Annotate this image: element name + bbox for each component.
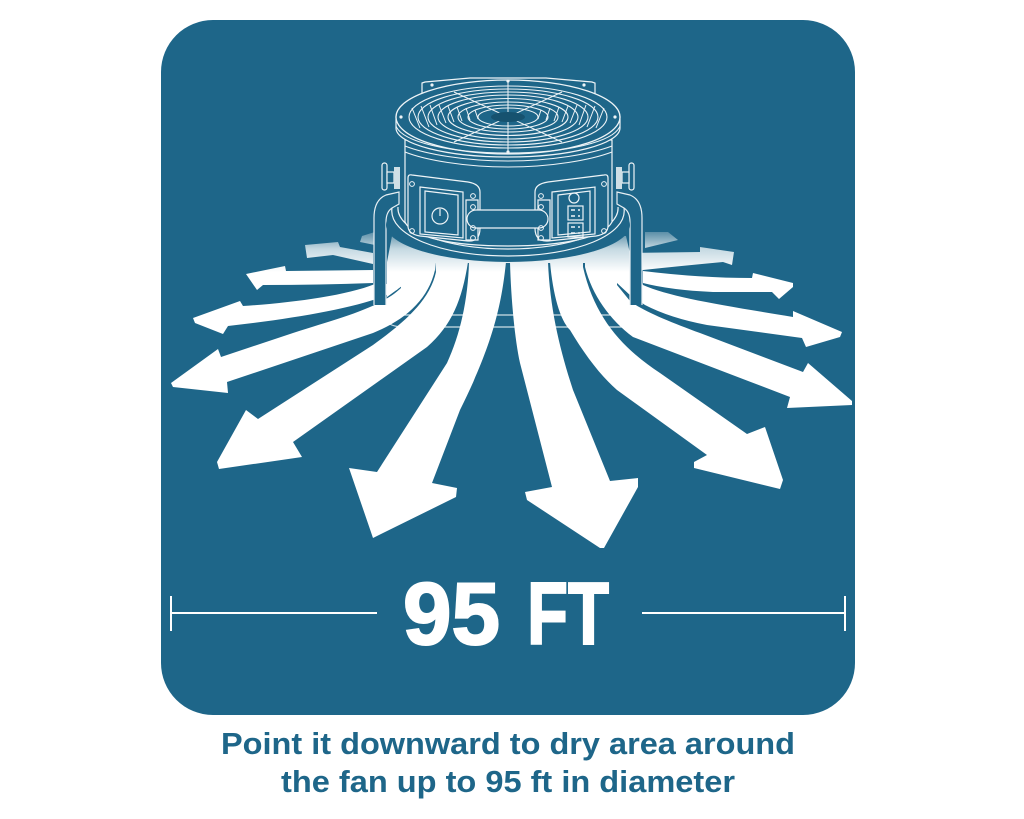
heading: 95 FT: FT bbox=[527, 564, 609, 663]
right leg bbox=[617, 192, 642, 305]
plate screws bbox=[410, 182, 606, 240]
base ring bbox=[386, 188, 630, 262]
floor ring lines bbox=[387, 315, 625, 327]
fan bbox=[382, 78, 634, 262]
heading: 95 FT bbox=[403, 564, 609, 663]
arrow: left 1 bbox=[246, 266, 373, 290]
mounting bracket bbox=[422, 78, 595, 95]
arrow: center right bbox=[510, 262, 638, 548]
arrow: left 4 bbox=[217, 262, 468, 469]
airflow arrows bbox=[171, 231, 852, 548]
rim bbox=[396, 117, 620, 157]
arrow: center left bbox=[349, 262, 506, 538]
arrow: faded right bbox=[623, 247, 734, 270]
fan hub bbox=[491, 112, 525, 122]
arrow: left 2 bbox=[193, 284, 398, 334]
arrow: right 1 bbox=[643, 271, 793, 299]
left switch box bbox=[420, 187, 463, 238]
arrow: right 3 bbox=[585, 262, 852, 408]
rim bolts bbox=[399, 79, 617, 154]
panel: blue background bbox=[161, 20, 855, 715]
grille rings bbox=[409, 86, 607, 148]
caption line 1: Point it downward to dry area around bbox=[221, 726, 795, 761]
handle bbox=[466, 200, 550, 240]
grille spokes bbox=[454, 81, 562, 152]
fan stand legs bbox=[374, 192, 642, 305]
caption line 2: the fan up to 95 ft in diameter bbox=[281, 764, 735, 799]
heading: 95 FT: 95 bbox=[403, 564, 500, 663]
side knob right bbox=[616, 163, 634, 190]
arrow: right 4 bbox=[550, 262, 783, 489]
inner rim bbox=[396, 126, 620, 153]
right control plate bbox=[535, 175, 608, 241]
arrow: upper faded left small bbox=[360, 231, 380, 246]
fan blade ticks bbox=[412, 105, 604, 128]
left control plate bbox=[408, 175, 480, 241]
dimension line right bbox=[642, 596, 845, 631]
body collar curves bbox=[405, 146, 612, 167]
fan body bbox=[405, 140, 612, 246]
arrow: upper faded right small bbox=[645, 232, 678, 248]
side knob left bbox=[382, 163, 400, 190]
left leg bbox=[374, 192, 399, 305]
arrow: right 2 bbox=[617, 262, 842, 347]
dimension line left bbox=[171, 596, 377, 631]
arrow: left 3 bbox=[171, 262, 435, 393]
right outlet box bbox=[552, 187, 595, 238]
top disk bbox=[396, 80, 620, 154]
arrow: faded left bbox=[305, 242, 373, 264]
glow under fan bbox=[387, 236, 632, 297]
